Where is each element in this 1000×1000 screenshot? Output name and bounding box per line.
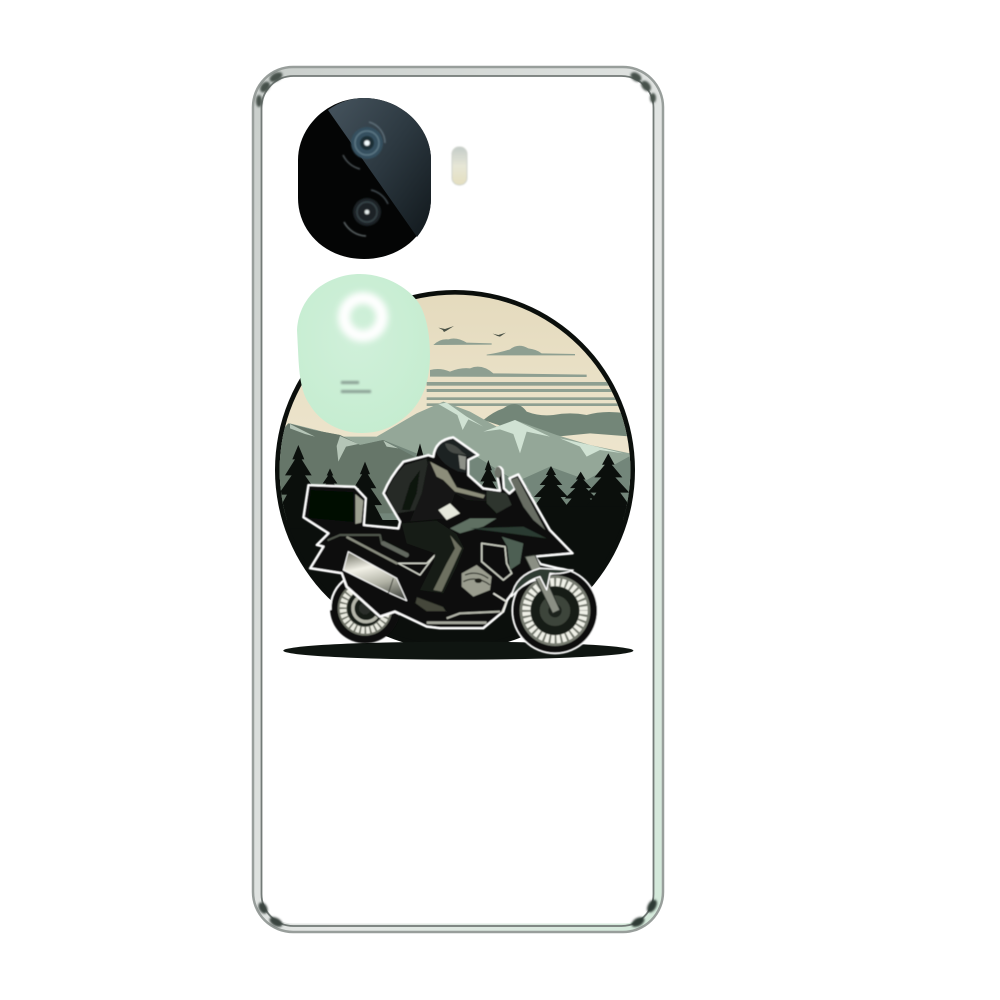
backpack shading — [402, 470, 420, 510]
glowing ring — [344, 298, 382, 336]
rear frame bars — [328, 535, 435, 575]
phone case outline — [253, 67, 663, 932]
forest silhouettes — [281, 444, 629, 520]
dark forest floor — [542, 506, 626, 520]
rider glove — [487, 491, 512, 513]
camera glass reflection — [328, 98, 431, 237]
bike and rider silhouette — [303, 437, 573, 628]
fairing accent — [502, 537, 523, 570]
jacket highlight — [430, 462, 485, 498]
lower lens — [344, 190, 388, 236]
back mountain range — [275, 402, 635, 513]
upper lens — [343, 122, 385, 169]
windshield inner — [511, 477, 545, 530]
leg highlight — [433, 535, 462, 592]
camera module — [298, 98, 431, 259]
birds — [438, 326, 506, 337]
far clouds — [483, 404, 633, 437]
circular badge ring — [275, 290, 635, 650]
motorcycle scene illustration — [270, 287, 640, 660]
boxer engine cylinder — [462, 565, 492, 597]
fairing top — [470, 527, 547, 538]
rear wheel — [330, 573, 400, 643]
sky — [270, 287, 640, 487]
green module sticker — [297, 274, 430, 433]
circular badge landscape — [280, 294, 630, 520]
rear view mirror — [495, 467, 501, 478]
ridge snow streaks — [290, 424, 398, 462]
motorcycle — [303, 437, 599, 654]
rider jacket and arm — [410, 460, 490, 522]
side fairing panel — [482, 543, 512, 580]
exhaust pipe — [343, 552, 407, 601]
camera flash — [452, 147, 467, 185]
clouds and horizon bands — [427, 339, 623, 406]
rider legs — [402, 521, 464, 593]
case corner: top right — [629, 70, 656, 103]
top case side — [355, 494, 363, 524]
rider helmet — [436, 439, 476, 473]
case corner: bottom left — [257, 901, 284, 929]
front fender — [512, 568, 573, 597]
case corner: top left — [256, 70, 284, 107]
snow caps — [438, 403, 623, 457]
front wheel — [511, 567, 599, 654]
fuel tank highlight — [450, 518, 497, 533]
rider backpack — [387, 458, 430, 513]
left ridge shading — [280, 423, 415, 514]
case corner: bottom right — [630, 898, 659, 929]
illegible tiny printed marks — [341, 381, 371, 393]
rider boot — [415, 597, 447, 612]
front fork — [525, 555, 560, 613]
lower frame and footpeg bars — [427, 593, 507, 623]
front mountain ridge — [275, 423, 635, 520]
top case face — [308, 490, 353, 522]
jacket lower panel — [438, 503, 460, 520]
ground shadow — [283, 642, 633, 660]
